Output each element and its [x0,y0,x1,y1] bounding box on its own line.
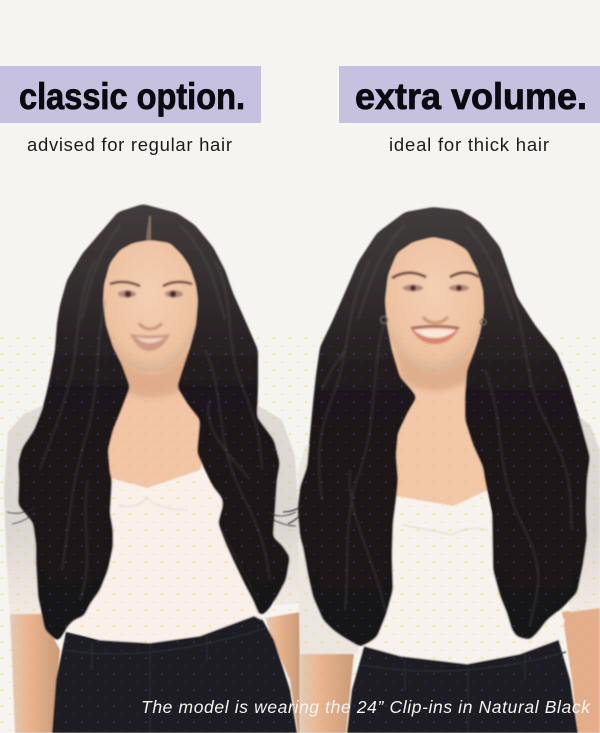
halftone dots: yellow on light areas [0,336,600,733]
right nose [423,317,448,323]
label bar right [339,66,600,123]
subtitle: advised for regular hair: advised for regular hair [27,134,232,155]
left jeans [52,612,297,733]
left face [100,228,200,372]
photo: model with extra volume [283,207,600,733]
subtitle: ideal for thick hair: ideal for thick hair [389,134,549,155]
left eyes [118,290,183,298]
left top gather [118,498,188,510]
right jeans [347,635,578,733]
left chest and neck [104,330,215,488]
right top gather [402,525,488,535]
left hair part [146,216,151,240]
right neck shade [392,340,480,391]
left lips [130,334,170,351]
left belt line [64,628,266,733]
right sleeves [298,405,600,654]
heading: extra volume: extra volume. [355,76,587,117]
left forearms [10,612,300,733]
left nose [139,323,162,329]
right hair strands [319,225,572,625]
heading: classic option: classic option. [19,76,245,117]
right eyebrows [392,272,479,278]
left hair strands [40,225,270,600]
left hair [18,204,290,642]
left neck shade [112,345,190,398]
right chest and neck [386,330,488,506]
right earrings [380,316,486,325]
left top [64,468,262,643]
caption: model note: The model is wearing the 24” Clip-ins in Natural Black [141,697,591,717]
right eyes [403,285,469,291]
right belt line [362,652,566,733]
right hair wisps [283,505,304,524]
panel: extra volume header [339,66,600,155]
right smile [411,327,459,344]
left sleeves [4,404,300,614]
right facial features [392,272,479,344]
right face [382,224,486,372]
label bar left [0,66,261,123]
photo: model with classic option [4,204,300,733]
right forearms [300,606,600,733]
left eyebrows [110,282,192,286]
left hair wisps [7,508,296,600]
right top [360,492,565,664]
panel: classic option header [0,66,261,155]
right hair [298,207,590,647]
halftone dots: blue on dark areas [0,336,600,733]
left facial features [110,282,192,351]
